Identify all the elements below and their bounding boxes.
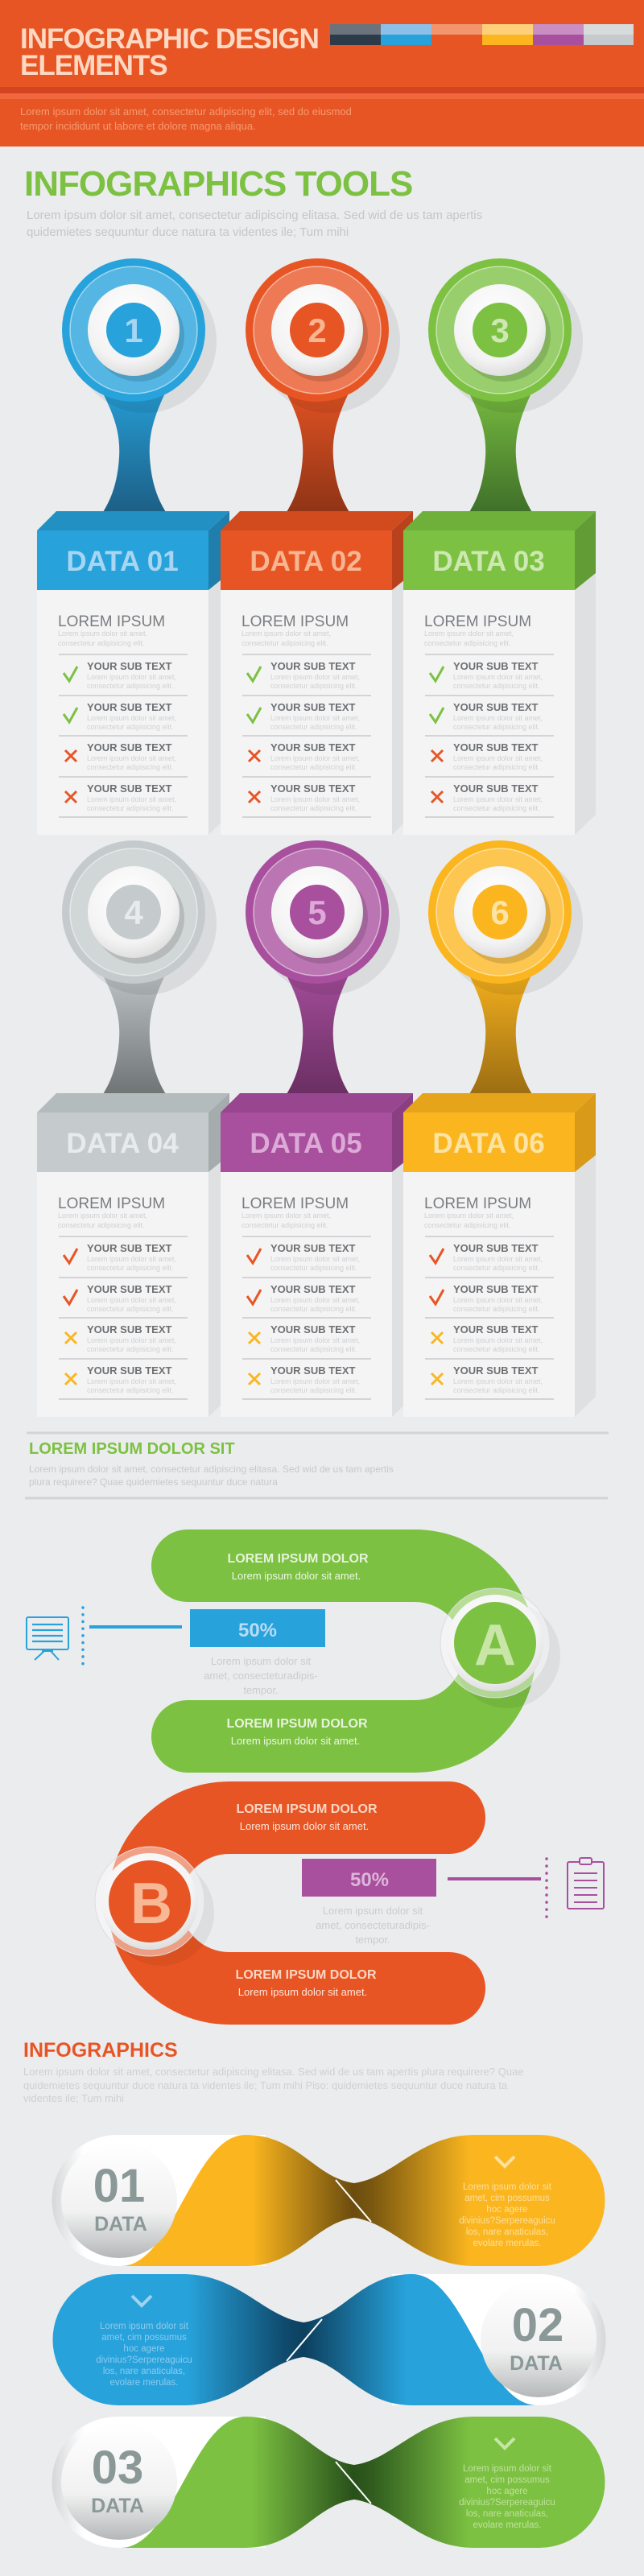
panel: data 03: consectetur adipisicing elit. — [424, 639, 511, 647]
stat: 50% purple — [302, 1859, 436, 1946]
panel: data 04: YOUR SUB TEXT — [87, 1283, 172, 1295]
panel: data 04: YOUR SUB TEXT — [87, 1323, 172, 1335]
panel: data 05: Lorem ipsum dolor sit amet, — [270, 1255, 360, 1263]
ribbon: 03 data green: amet, cim possumus — [464, 2475, 550, 2485]
panel: data 04: consectetur adipisicing elit. — [58, 1221, 145, 1229]
panel: data 02 — [221, 258, 413, 835]
ribbon: 02 data blue: DATA — [510, 2352, 563, 2375]
panel: data 05: Lorem ipsum dolor sit amet, — [270, 1377, 360, 1385]
panel: data 05: YOUR SUB TEXT — [270, 1364, 356, 1377]
panel: data 03: Lorem ipsum dolor sit amet, — [424, 630, 514, 638]
panel: data 02: YOUR SUB TEXT — [270, 741, 356, 753]
heading: infographics — [23, 2039, 523, 2104]
panel: data 01: YOUR SUB TEXT — [87, 741, 172, 753]
panel: data 01: consectetur adipisicing elit. — [87, 763, 174, 771]
panel: data 06: DATA 06 — [432, 1128, 545, 1159]
badge A — [440, 1588, 560, 1708]
ribbon: 03 data green: 03 — [92, 2442, 143, 2494]
panel: data 01: LOREM IPSUM — [58, 613, 165, 630]
panel: data 02: Lorem ipsum dolor sit amet, — [270, 714, 360, 722]
panel: data 03: 3 — [490, 312, 510, 349]
panel: data 03: Lorem ipsum dolor sit amet, — [453, 795, 543, 803]
panel: data 06: Lorem ipsum dolor sit amet, — [453, 1377, 543, 1385]
badge B — [95, 1847, 214, 1966]
heading: lorem ipsum dolor sit: LOREM IPSUM DOLOR SIT — [29, 1440, 235, 1458]
heading: lorem ipsum dolor sit: Lorem ipsum dolor sit amet, consectetur adipiscing elitasa. Sed wid de us tam apertis — [29, 1463, 394, 1475]
panel: data 01: YOUR SUB TEXT — [87, 782, 172, 795]
stat: 50% blue: amet, consecteturadipis- — [204, 1670, 318, 1682]
panel: data 01: Lorem ipsum dolor sit amet, — [87, 795, 176, 803]
stat: 50% purple: 50% — [350, 1869, 389, 1891]
icon: clipboard — [568, 1858, 604, 1909]
panel: data 03: Lorem ipsum dolor sit amet, — [453, 754, 543, 762]
colour palette — [330, 24, 634, 45]
ribbon: 01 data yellow: DATA — [94, 2213, 147, 2235]
panel: data 06: YOUR SUB TEXT — [453, 1283, 539, 1295]
stat: 50% blue: 50% — [238, 1620, 277, 1641]
panel: data 03: YOUR SUB TEXT — [453, 701, 539, 713]
panel: data 05: Lorem ipsum dolor sit amet, — [270, 1296, 360, 1304]
panel: data 04: Lorem ipsum dolor sit amet, — [87, 1255, 176, 1263]
ribbon: 03 data green: Lorem ipsum dolor sit — [463, 2464, 552, 2474]
panel: data 06: Lorem ipsum dolor sit amet, — [453, 1336, 543, 1344]
panel: data 03: Lorem ipsum dolor sit amet, — [453, 673, 543, 681]
orange S-shape B: LOREM IPSUM DOLOR — [236, 1802, 378, 1816]
ribbon: 02 data blue: hoc agere — [123, 2344, 165, 2354]
ribbon: 01 data yellow: evolare merulas. — [473, 2239, 542, 2248]
heading: infographics: videntes ile; Tum mihi — [23, 2092, 124, 2104]
stat: 50% purple: amet, consecteturadipis- — [316, 1919, 430, 1931]
panel: data 06: YOUR SUB TEXT — [453, 1364, 539, 1377]
panel: data 01: consectetur adipisicing elit. — [87, 682, 174, 690]
panel: data 03: DATA 03 — [432, 546, 545, 577]
panel: data 02: consectetur adipisicing elit. — [270, 763, 357, 771]
ribbon: 02 data blue: evolare merulas. — [109, 2378, 179, 2388]
ribbon: 03 data green: hoc agere — [486, 2487, 528, 2496]
panel: data 01: YOUR SUB TEXT — [87, 660, 172, 672]
panel: data 03: YOUR SUB TEXT — [453, 782, 539, 795]
stat: 50% blue: tempor. — [243, 1684, 279, 1696]
heading: infographics tools: Lorem ipsum dolor sit amet, consectetur adipiscing elitasa. Sed wid de us tam apertis — [27, 208, 482, 222]
ribbon: 01 data yellow: 01 — [93, 2160, 145, 2212]
panel: data 06: consectetur adipisicing elit. — [453, 1345, 540, 1353]
panel: data 02: Lorem ipsum dolor sit amet, — [270, 673, 360, 681]
panel: data 02: LOREM IPSUM — [242, 613, 349, 630]
panel: data 06 — [403, 840, 596, 1417]
panel: data 03: Lorem ipsum dolor sit amet, — [453, 714, 543, 722]
panel: data 06: YOUR SUB TEXT — [453, 1242, 539, 1254]
panel: data 02: consectetur adipisicing elit. — [270, 804, 357, 812]
ribbon: 02 data blue — [53, 2274, 605, 2405]
panel: data 02: YOUR SUB TEXT — [270, 660, 356, 672]
orange S-shape B: Lorem ipsum dolor sit amet. — [238, 1986, 367, 1998]
ribbon: 03 data green: los, nare anaticulas, — [466, 2509, 548, 2519]
panel: data 04: Lorem ipsum dolor sit amet, — [87, 1377, 176, 1385]
green S-shape A: LOREM IPSUM DOLOR — [226, 1717, 368, 1731]
panel: data 01 — [37, 258, 229, 835]
header banner — [0, 0, 644, 147]
panel: data 02: 2 — [308, 312, 327, 349]
heading: infographics: Lorem ipsum dolor sit amet, consectetur adipiscing elitasa. Sed wid de us tam apertis plura requirere? Quae — [23, 2066, 523, 2078]
heading: infographics tools: INFOGRAPHICS TOOLS — [24, 164, 412, 204]
panel: data 04: YOUR SUB TEXT — [87, 1242, 172, 1254]
panel: data 04: Lorem ipsum dolor sit amet, — [87, 1336, 176, 1344]
panel: data 05: consectetur adipisicing elit. — [242, 1221, 328, 1229]
panel: data 04: consectetur adipisicing elit. — [87, 1264, 174, 1272]
header banner: tempor incididunt ut labore et dolore magna aliqua. — [20, 120, 256, 132]
badge B: B — [130, 1872, 172, 1936]
panel: data 05: 5 — [308, 894, 327, 931]
panel: data 06: consectetur adipisicing elit. — [453, 1386, 540, 1394]
panel: data 02: consectetur adipisicing elit. — [270, 682, 357, 690]
panel: data 01: Lorem ipsum dolor sit amet, — [87, 714, 176, 722]
panel: data 05: consectetur adipisicing elit. — [270, 1264, 357, 1272]
green S-shape A: Lorem ipsum dolor sit amet. — [232, 1570, 361, 1582]
heading: infographics: quidemietes sequuntur duce natura ta videntes ile; Tum mihi Piso: quidemietes sequuntur duce natura ta — [23, 2079, 508, 2091]
ribbon: 01 data yellow: los, nare anaticulas, — [466, 2227, 548, 2237]
panel: data 06: Lorem ipsum dolor sit amet, — [453, 1296, 543, 1304]
panel: data 02: Lorem ipsum dolor sit amet, — [242, 630, 331, 638]
stat: 50% blue: Lorem ipsum dolor sit — [211, 1655, 312, 1667]
panel: data 04: YOUR SUB TEXT — [87, 1364, 172, 1377]
panel: data 03: consectetur adipisicing elit. — [453, 763, 540, 771]
panel: data 05: YOUR SUB TEXT — [270, 1323, 356, 1335]
ribbon: 01 data yellow — [52, 2135, 605, 2266]
orange S-shape B — [108, 1781, 485, 2025]
ribbon: 01 data yellow: hoc agere — [486, 2205, 528, 2215]
green S-shape A — [151, 1530, 536, 1773]
panel: data 03: consectetur adipisicing elit. — [453, 804, 540, 812]
ribbon: 02 data blue: divinius?Serpereaguicu — [96, 2355, 192, 2365]
panel: data 05: YOUR SUB TEXT — [270, 1283, 356, 1295]
ribbon: 02 data blue: 02 — [512, 2299, 564, 2351]
ribbon: 03 data green: evolare merulas. — [473, 2520, 542, 2530]
panel: data 06: consectetur adipisicing elit. — [424, 1221, 511, 1229]
panel: data 04 — [37, 840, 229, 1417]
panel: data 04: LOREM IPSUM — [58, 1195, 165, 1212]
green S-shape A: LOREM IPSUM DOLOR — [227, 1552, 369, 1566]
panel: data 06: consectetur adipisicing elit. — [453, 1264, 540, 1272]
panel: data 01: Lorem ipsum dolor sit amet, — [87, 754, 176, 762]
panel: data 04: 4 — [124, 894, 143, 931]
panel: data 01: consectetur adipisicing elit. — [87, 723, 174, 731]
ribbon: 02 data blue: amet, cim possumus — [101, 2333, 187, 2343]
panel: data 05: Lorem ipsum dolor sit amet, — [270, 1336, 360, 1344]
ribbon: 03 data green: divinius?Serpereaguicu — [459, 2498, 555, 2508]
heading: infographics: INFOGRAPHICS — [23, 2039, 178, 2062]
ribbon: 01 data yellow: divinius?Serpereaguicu — [459, 2216, 555, 2226]
connector: purple dotted line — [448, 1859, 547, 1917]
ribbon: 03 data green: DATA — [91, 2495, 144, 2517]
heading: lorem ipsum dolor sit — [29, 1440, 394, 1488]
panel: data 01: 1 — [124, 312, 143, 349]
stat: 50% purple: Lorem ipsum dolor sit — [323, 1905, 423, 1917]
panel: data 01: consectetur adipisicing elit. — [58, 639, 145, 647]
panel: data 06: 6 — [490, 894, 510, 931]
panel: data 05: consectetur adipisicing elit. — [270, 1305, 357, 1313]
panel: data 05: DATA 05 — [250, 1128, 362, 1159]
panel: data 02: DATA 02 — [250, 546, 362, 577]
stat: 50% purple: tempor. — [355, 1934, 390, 1946]
badge A: A — [474, 1613, 516, 1678]
ribbon: 02 data blue: los, nare anaticulas, — [103, 2367, 185, 2376]
panel: data 03: YOUR SUB TEXT — [453, 741, 539, 753]
ribbon: 01 data yellow: amet, cim possumus — [464, 2194, 550, 2203]
stat: 50% blue — [190, 1609, 325, 1696]
panel: data 01: consectetur adipisicing elit. — [87, 804, 174, 812]
panel: data 02: consectetur adipisicing elit. — [242, 639, 328, 647]
panel: data 05: consectetur adipisicing elit. — [270, 1386, 357, 1394]
panel: data 06: consectetur adipisicing elit. — [453, 1305, 540, 1313]
panel: data 02: YOUR SUB TEXT — [270, 782, 356, 795]
panel: data 02: consectetur adipisicing elit. — [270, 723, 357, 731]
ribbon: 03 data green — [52, 2417, 605, 2548]
panel: data 04: DATA 04 — [66, 1128, 179, 1159]
panel: data 01: Lorem ipsum dolor sit amet, — [87, 673, 176, 681]
panel: data 04: consectetur adipisicing elit. — [87, 1386, 174, 1394]
panel: data 06: LOREM IPSUM — [424, 1195, 531, 1212]
panel: data 05: consectetur adipisicing elit. — [270, 1345, 357, 1353]
panel: data 01: DATA 01 — [66, 546, 179, 577]
heading: infographics tools — [24, 164, 482, 239]
icon: presentation board — [27, 1617, 68, 1660]
ribbon: 01 data yellow: Lorem ipsum dolor sit — [463, 2182, 552, 2192]
panel: data 05 — [221, 840, 413, 1417]
green S-shape A: Lorem ipsum dolor sit amet. — [231, 1735, 360, 1747]
panel: data 04: consectetur adipisicing elit. — [87, 1345, 174, 1353]
header subtitle: Lorem ipsum dolor sit amet, consectetur adipiscing elit, sed do eiusmod — [20, 105, 352, 118]
panel: data 05: LOREM IPSUM — [242, 1195, 349, 1212]
heading: lorem ipsum dolor sit: plura requirere? Quae quidemietes sequuntur duce natura — [29, 1476, 278, 1488]
panel: data 03: LOREM IPSUM — [424, 613, 531, 630]
panel: data 04: consectetur adipisicing elit. — [87, 1305, 174, 1313]
heading: infographics tools: quidemietes sequuntur duce natura ta videntes ile; Tum mihi — [27, 225, 349, 239]
orange S-shape B: LOREM IPSUM DOLOR — [235, 1968, 377, 1982]
panel: data 02: Lorem ipsum dolor sit amet, — [270, 754, 360, 762]
header banner: ELEMENTS — [20, 50, 167, 81]
panel: data 06: Lorem ipsum dolor sit amet, — [453, 1255, 543, 1263]
ribbon: 02 data blue: Lorem ipsum dolor sit — [100, 2322, 189, 2331]
panel: data 01: Lorem ipsum dolor sit amet, — [58, 630, 147, 638]
panel: data 05: YOUR SUB TEXT — [270, 1242, 356, 1254]
panel: data 03: consectetur adipisicing elit. — [453, 723, 540, 731]
orange S-shape B: Lorem ipsum dolor sit amet. — [240, 1820, 369, 1832]
panel: data 03 — [403, 258, 596, 835]
panel: data 03: YOUR SUB TEXT — [453, 660, 539, 672]
panel: data 03: consectetur adipisicing elit. — [453, 682, 540, 690]
panel: data 06: Lorem ipsum dolor sit amet, — [424, 1212, 514, 1220]
panel: data 01: YOUR SUB TEXT — [87, 701, 172, 713]
title: INFOGRAPHIC DESIGN — [20, 23, 319, 55]
panel: data 02: Lorem ipsum dolor sit amet, — [270, 795, 360, 803]
panel: data 04: Lorem ipsum dolor sit amet, — [58, 1212, 147, 1220]
panel: data 04: Lorem ipsum dolor sit amet, — [87, 1296, 176, 1304]
panel: data 06: YOUR SUB TEXT — [453, 1323, 539, 1335]
panel: data 02: YOUR SUB TEXT — [270, 701, 356, 713]
connector: blue dotted line — [83, 1608, 182, 1664]
panel: data 05: Lorem ipsum dolor sit amet, — [242, 1212, 331, 1220]
